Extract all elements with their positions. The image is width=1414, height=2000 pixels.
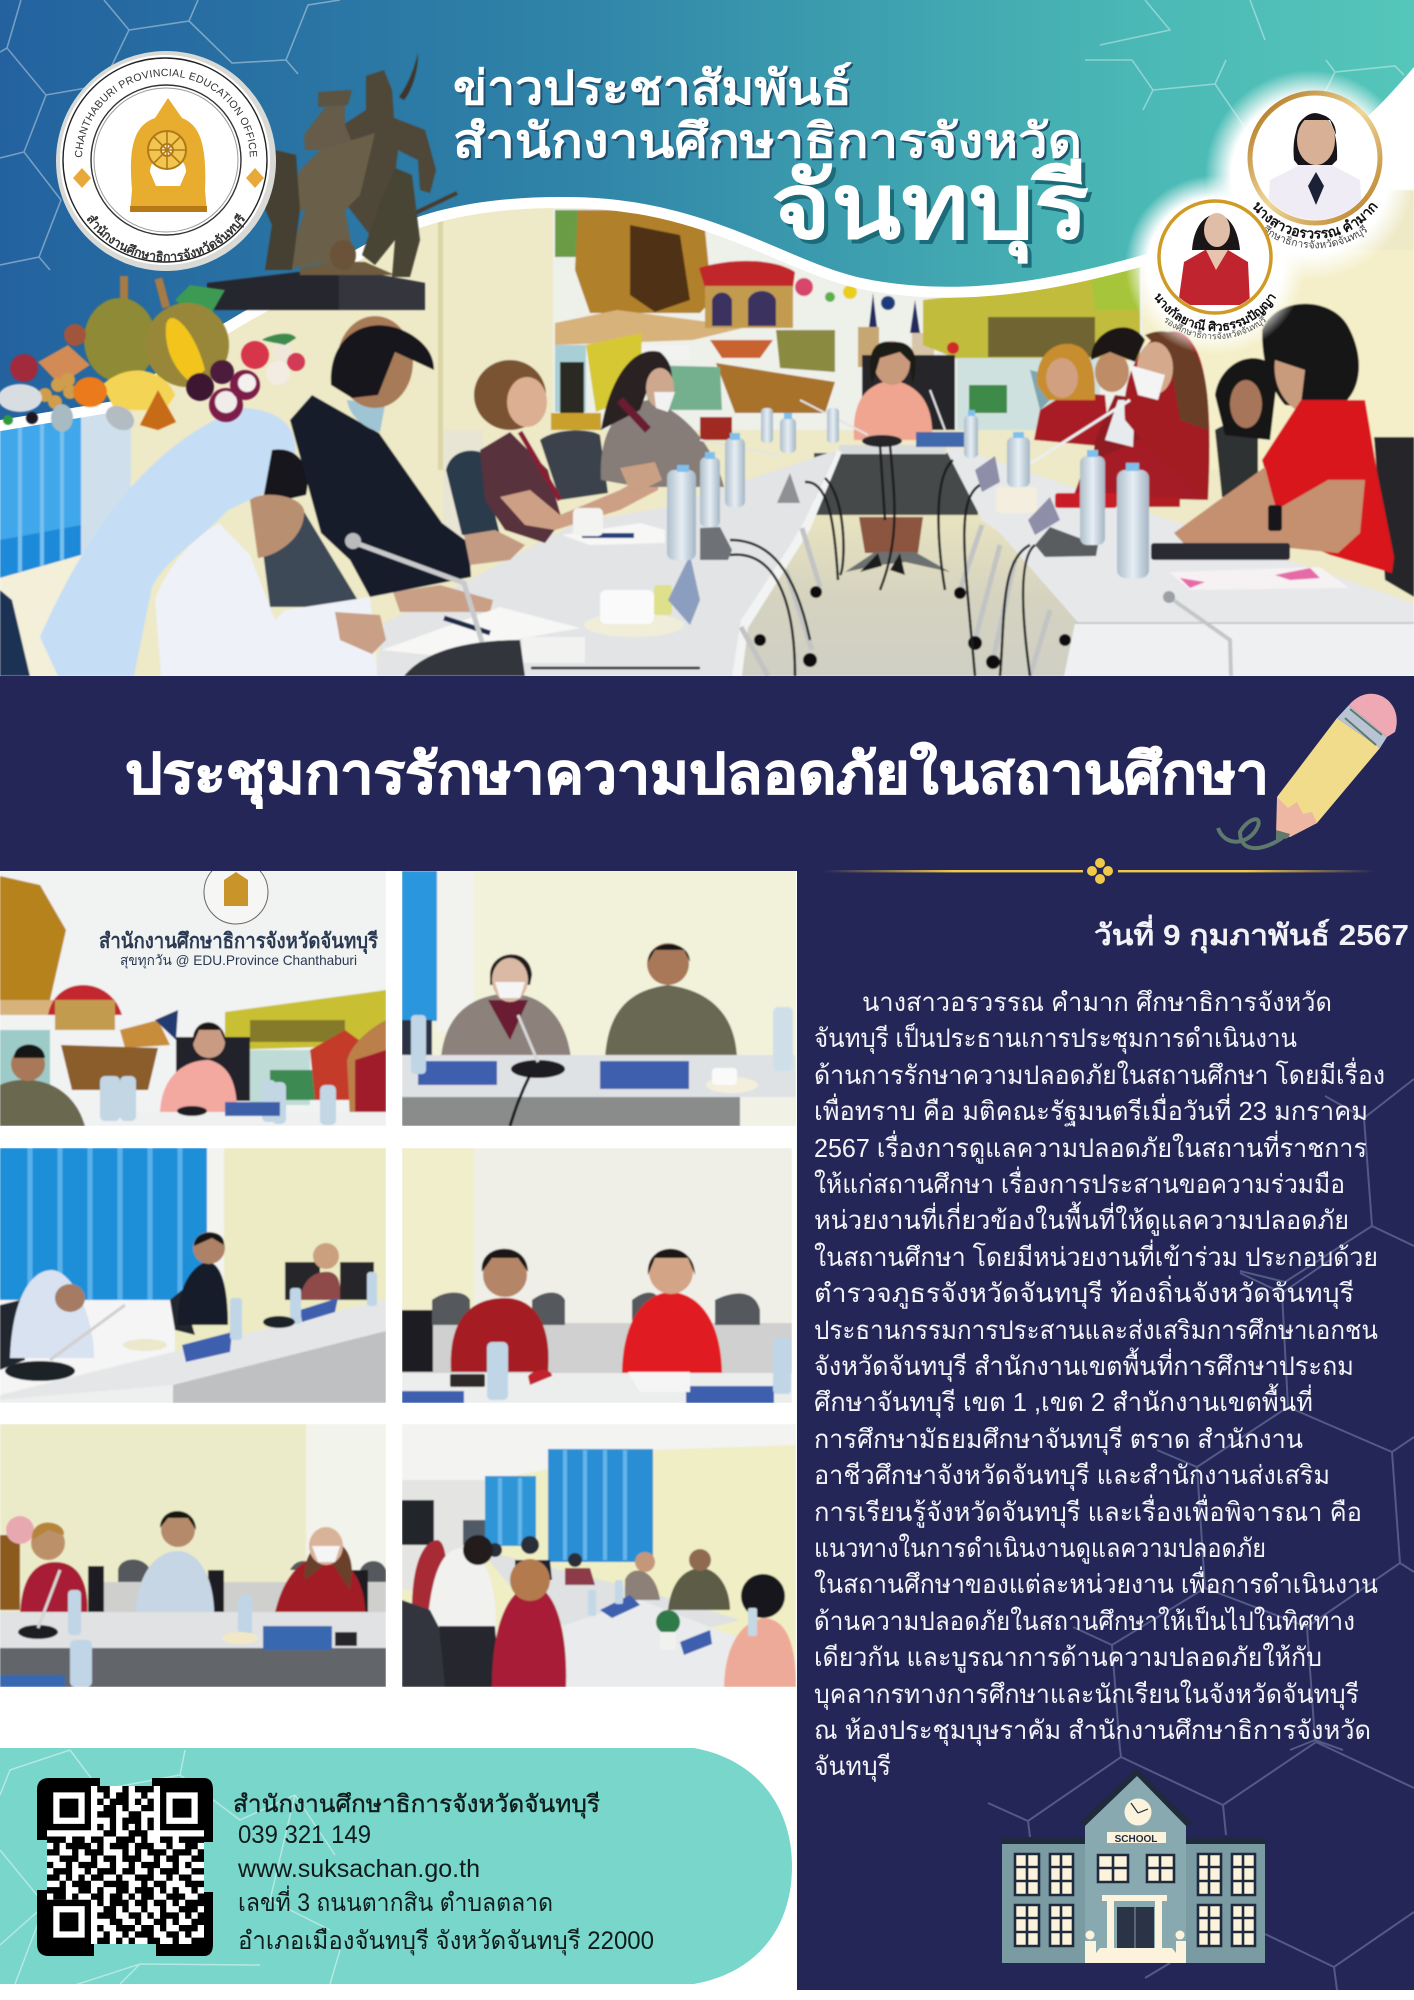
article text: ตำรวจภูธรจังหวัดจันทบุรี ท้องถิ่นจังหวัดจันทบุรี	[814, 1275, 1354, 1309]
hero banner	[0, 0, 1414, 676]
article text: จังหวัดจันทบุรี สำนักงานเขตพื้นที่การศึกษาประถม	[814, 1347, 1354, 1382]
article text: ด้านการรักษาความปลอดภัยในสถานศึกษา โดยมีเรื่อง	[814, 1057, 1385, 1090]
centre woman	[845, 341, 950, 575]
woman in grey cardigan	[601, 351, 724, 495]
portrait: deputy director: รองศึกษาธิการจังหวัดจันทบุรี	[1165, 315, 1266, 340]
icon: school building: SCHOOL	[1115, 1834, 1157, 1845]
article text: ณ ห้องประชุมบุษราคัม สำนักงานศึกษาธิการจังหวัด	[814, 1715, 1371, 1746]
photo 1: director at the backdrop: สำนักงานศึกษาธิการจังหวัดจันทบุรี	[99, 929, 379, 955]
photo 1: director at the backdrop	[0, 860, 386, 1126]
table items	[345, 390, 1349, 676]
banner title: จันทบุรี	[771, 156, 1089, 264]
article text: ประธานกรรมการประสานและส่งเสริมการศึกษาเอกชน	[814, 1315, 1378, 1345]
photo 2: woman and police officer	[402, 871, 796, 1126]
article text: อาชีวศึกษาจังหวัดจันทบุรี และสำนักงานส่งเสริม	[814, 1460, 1330, 1491]
meeting room photo	[0, 190, 1414, 676]
windows	[1015, 1854, 1255, 1946]
article text: แนวทางในการดำเนินงานดูแลความปลอดภัย	[814, 1533, 1266, 1564]
left curtain and wall	[0, 418, 82, 542]
floor	[741, 515, 1081, 676]
article text: หน่วยงานที่เกี่ยวข้องในพื้นที่ให้ดูแลความปลอดภัย	[814, 1201, 1349, 1236]
mural wall	[551, 205, 1143, 440]
cables	[531, 445, 1035, 676]
teal wave background with white edge	[0, 0, 1414, 420]
article text: จันทบุรี	[814, 1751, 891, 1782]
lace cloth and chairs	[443, 430, 483, 540]
navy heading band and right column	[0, 676, 1414, 1990]
contact details: www.suksachan.go.th	[237, 1855, 480, 1883]
left table	[375, 450, 837, 676]
article text: ด้านความปลอดภัยในสถานศึกษาให้เป็นไปในทิศทาง	[814, 1605, 1355, 1636]
date: วันที่ 9 กุมภาพันธ์ 2567	[1094, 914, 1409, 953]
centre table	[814, 453, 978, 515]
article text: บุคลากรทางการศึกษาและนักเรียนในจังหวัดจันทบุรี	[814, 1679, 1359, 1710]
icon: school building	[1001, 1768, 1266, 1963]
contact details: สำนักงานศึกษาธิการจังหวัดจันทบุรี	[233, 1791, 600, 1819]
article text: นางสาวอรวรรณ คำมาก ศึกษาธิการจังหวัด	[862, 987, 1332, 1017]
article text: ศึกษาจันทบุรี เขต 1 ,เขต 2 สำนักงานเขตพื้นที่	[814, 1383, 1313, 1418]
article text: ในสถานศึกษา โดยมีหน่วยงานที่เข้าร่วม ประกอบด้วย	[814, 1239, 1378, 1272]
provincial education office logo: สำนักงานศึกษาธิการจังหวัดจันทบุรี	[86, 212, 245, 262]
contact details: เลขที่ 3 ถนนตากสิน ตำบลตลาด	[238, 1885, 553, 1917]
article text: ในสถานศึกษาของแต่ละหน่วยงาน เพื่อการดำเนินงาน	[814, 1566, 1378, 1599]
contact details: 039 321 149	[238, 1821, 371, 1849]
article text: จันทบุรี เป็นประธานเการประชุมการดำเนินงาน	[814, 1022, 1297, 1054]
portrait: director: นางสาวอรวรรณ คำมาก	[1253, 202, 1378, 239]
banner title: ข่าวประชาสัมพันธ์	[453, 61, 852, 114]
photo 4: two women in red	[402, 1148, 792, 1403]
nun	[40, 408, 493, 676]
decorative gold divider	[823, 858, 1375, 884]
contact panel	[0, 1748, 792, 1985]
heading: ประชุมการรักษาความปลอดภัยในสถานศึกษา	[125, 741, 1269, 809]
contact details	[233, 1791, 654, 1956]
provincial education office logo: CHANTHABURI PROVINCIAL EDUCATION OFFICE	[74, 68, 258, 158]
article text: การเรียนรู้จังหวัดจันทบุรี และเรื่องเพื่อพิจารณา คือ	[814, 1494, 1362, 1528]
photo 5: three participants at the table	[0, 1424, 386, 1687]
QR code	[37, 1778, 213, 1956]
water bottles	[667, 408, 1149, 578]
banner title: สำนักงานศึกษาธิการจังหวัด	[453, 114, 1082, 167]
door and steps	[1085, 1895, 1186, 1963]
banner title	[453, 61, 1089, 264]
article text: ให้แก่สถานศึกษา เรื่องการประสานขอความร่วมมือ	[814, 1166, 1345, 1199]
photo 6: wide view of the meeting room	[402, 1424, 796, 1687]
right table	[946, 446, 1414, 623]
portrait: director	[1248, 90, 1382, 248]
portrait: deputy director	[1154, 199, 1276, 340]
portrait: director: ศึกษาธิการจังหวัดจันทบุรี	[1264, 224, 1367, 248]
woman in red dress	[1174, 304, 1394, 573]
right group	[1034, 327, 1278, 500]
table legs and wheels	[741, 525, 1050, 676]
emblem	[130, 98, 207, 212]
article text: เพื่อทราบ คือ มติคณะรัฐมนตรีเมื่อวันที่ 23 มกราคม	[814, 1093, 1368, 1127]
article text: เดียวกัน และบูรณาการด้านความปลอดภัยให้กับ	[814, 1642, 1322, 1673]
article text	[814, 987, 1385, 1782]
woman in patterned dress	[474, 360, 660, 543]
white glow behind portraits	[1125, 70, 1414, 355]
icon: pencil	[1218, 694, 1397, 848]
portrait: deputy director: นางกัลยาณี ศิวธรรมปัญญา	[1154, 293, 1276, 332]
man in dark suit	[290, 316, 525, 597]
fruit and gems cluster	[0, 276, 305, 435]
statue of King Taksin	[207, 53, 457, 310]
photo 3: participants by blue curtain	[0, 1148, 386, 1403]
article text: การศึกษามัธยมศึกษาจันทบุรี ตราด สำนักงาน	[814, 1424, 1303, 1455]
article text: 2567 เรื่องการดูแลความปลอดภัยในสถานที่ราชการ	[814, 1130, 1367, 1164]
provincial education office logo	[56, 51, 276, 271]
photo 1: director at the backdrop: สุขทุกวัน @ EDU.Province Chanthaburi	[120, 952, 357, 969]
contact details: อำเภอเมืองจันทบุรี จังหวัดจันทบุรี 22000	[238, 1927, 654, 1956]
